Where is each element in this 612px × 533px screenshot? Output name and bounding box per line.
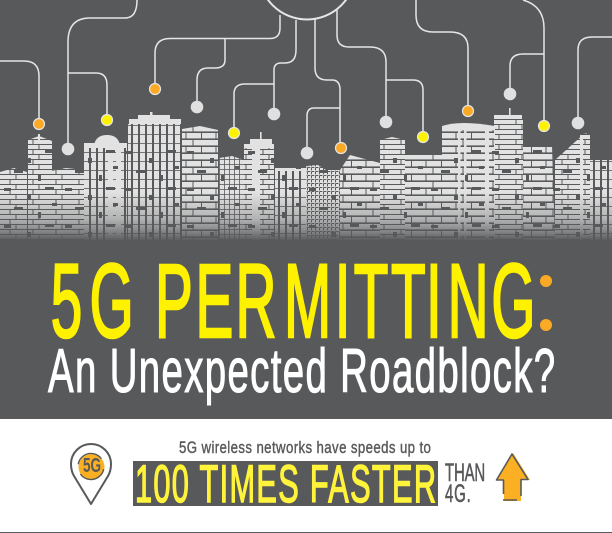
- building spires and domes: [38, 108, 522, 148]
- node: gray 1: [62, 143, 74, 155]
- grid tower: [219, 156, 244, 240]
- sloped brick building: [340, 155, 380, 240]
- node: gray 3: [268, 108, 280, 120]
- central tall tower: [128, 124, 182, 240]
- title colon: [540, 275, 552, 331]
- stat trailing text: 4G.: [445, 480, 471, 508]
- upper right tower: [494, 119, 523, 240]
- node: gray 5: [380, 116, 392, 128]
- stat lead-in text: 5G wireless networks have speeds up to: [179, 439, 431, 457]
- node: yellow 1: [102, 114, 112, 126]
- rounded brick tower: [380, 137, 405, 240]
- skyline: [0, 108, 612, 241]
- icon: up arrow: [496, 453, 530, 501]
- node: orange 4: [462, 106, 474, 116]
- ladder tower: [442, 128, 495, 240]
- spire tower: [244, 148, 274, 240]
- node: orange 3: [336, 142, 346, 154]
- node: yellow 2: [228, 128, 240, 138]
- irregular window gaps: [0, 150, 612, 240]
- subtitle: An Unexpected Roadblock?: [48, 336, 555, 405]
- icon: 5G map pin: 5G: [83, 454, 101, 477]
- node: orange 1: [34, 118, 44, 130]
- ribbed low building: [275, 168, 306, 240]
- stat trailing text: THAN: [445, 459, 485, 487]
- wide brick building: [405, 155, 442, 240]
- stat trailing text: [445, 459, 485, 508]
- speckled building: [306, 165, 340, 240]
- far right building: [590, 160, 612, 240]
- node: gray 6: [504, 88, 516, 100]
- skyline fade: [0, 192, 612, 241]
- node: orange 2: [150, 84, 160, 94]
- sloped right tower: [555, 133, 590, 240]
- node: yellow 3: [418, 132, 428, 142]
- bottom rule: [0, 532, 612, 533]
- tower with vertical bars: [84, 148, 127, 240]
- title: 5G PERMITTING: [51, 242, 535, 359]
- white stat band: [0, 419, 612, 533]
- node: yellow 4: [538, 120, 550, 132]
- node: gray 4: [301, 147, 313, 159]
- stat highlight: 100 TIMES FASTER: [135, 456, 436, 514]
- mid right building: [523, 146, 555, 240]
- low left buildings: [0, 168, 27, 240]
- dark header background: [0, 0, 612, 419]
- node: gray 7: [572, 117, 584, 129]
- icon: 5G map pin: [71, 444, 111, 504]
- circuit lines: [0, 0, 612, 153]
- node: gray 2: [191, 101, 203, 113]
- curved brick tower: [182, 126, 218, 240]
